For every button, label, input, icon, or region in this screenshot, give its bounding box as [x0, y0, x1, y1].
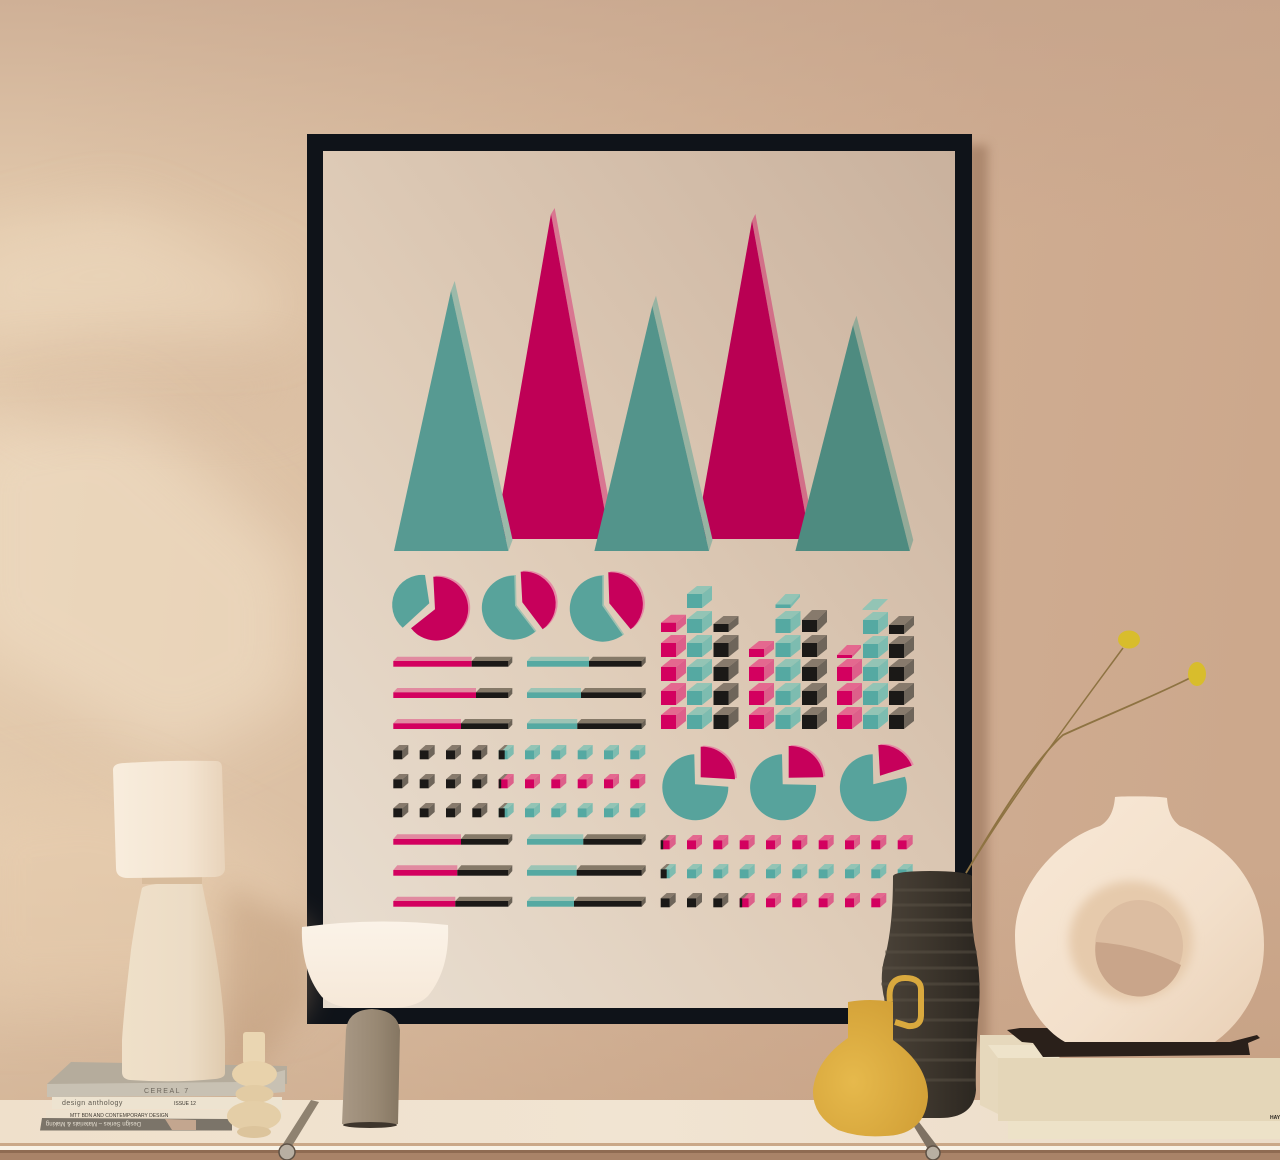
- magenta triangle 2: [695, 214, 815, 539]
- vase cup: [113, 761, 225, 878]
- pie 2: [482, 571, 558, 640]
- lower bar row 3 right: [527, 897, 646, 907]
- box base: [1008, 1121, 1280, 1139]
- book stack: [40, 1062, 287, 1130]
- lid top: [988, 1045, 1060, 1058]
- yellow jug: [813, 978, 928, 1136]
- stacked bars lower left: [393, 834, 646, 907]
- book three: MTT BDN AND CONTEMPORARY DESIGN: [70, 1113, 169, 1119]
- jug body: [813, 1000, 928, 1136]
- book two: [52, 1097, 282, 1109]
- column group 3: [837, 599, 914, 729]
- isometric cube columns: [661, 586, 914, 729]
- book one spine: [47, 1070, 285, 1097]
- lower bar row 3 left: [393, 897, 512, 907]
- cube row 2: [393, 774, 645, 788]
- book two: design anthology: [62, 1100, 123, 1107]
- book two: ISSUE 12: [174, 1101, 196, 1107]
- frame shadow on wall: [966, 145, 988, 1045]
- dark ribbed vase: [881, 871, 980, 1118]
- bar row 3 left: [393, 719, 512, 729]
- book one spine: CEREAL 7: [144, 1088, 190, 1095]
- shelf joint right: [913, 1122, 938, 1151]
- box lid: [998, 1058, 1280, 1121]
- right cube row 3: [661, 893, 886, 907]
- teal triangle 1: [394, 281, 513, 551]
- poster paper: [323, 151, 955, 1008]
- black tray: [1007, 1028, 1260, 1057]
- flower head 1: [1118, 630, 1140, 648]
- right cube row 2: [661, 864, 913, 878]
- lower bar row 1 right: [527, 834, 646, 845]
- bar row 3 right: [527, 719, 646, 729]
- marble stand: [342, 1009, 400, 1128]
- teal triangle 2: [594, 296, 713, 551]
- tall white vase: [113, 761, 225, 1081]
- lower bar row 2 left: [393, 865, 512, 876]
- triangle chart: [394, 208, 913, 551]
- bar row 2 right: [527, 688, 646, 698]
- cube row 1: [393, 745, 645, 759]
- book four: [40, 1118, 232, 1130]
- small pie C: [840, 744, 914, 821]
- box lid: HAY: [1270, 1115, 1280, 1121]
- vase neck ring: [142, 876, 202, 884]
- upper pie charts: [392, 571, 645, 642]
- book three: [46, 1110, 282, 1119]
- dried flower stems: [966, 630, 1206, 873]
- small pie B: [750, 745, 825, 820]
- small pie A: [662, 746, 737, 820]
- right cube row 1: [661, 835, 913, 849]
- small cube grid right: [661, 835, 913, 907]
- jug handle: [890, 978, 921, 1026]
- bar row 1 left: [393, 657, 512, 667]
- bar row 2 left: [393, 688, 512, 698]
- small cube grid left: [393, 745, 645, 817]
- chrome ball left: [279, 1144, 295, 1160]
- pie 1: [392, 575, 470, 641]
- stacked bars upper left: [393, 657, 646, 729]
- shelf: [0, 1100, 1280, 1160]
- vase silhouette: [1015, 796, 1264, 1042]
- object shadows on wall: [225, 885, 310, 1090]
- cube row 3: [393, 803, 645, 817]
- lower bar row 1 left: [393, 834, 512, 845]
- column group 1: [661, 586, 738, 729]
- magenta triangle 1: [495, 208, 616, 539]
- top book cover: [47, 1062, 287, 1084]
- pie 3: [570, 571, 645, 642]
- bar row 1 right: [527, 657, 646, 667]
- teal triangle 3: [795, 316, 913, 551]
- lower pie charts: [662, 744, 914, 821]
- white bowl: [302, 921, 448, 1008]
- book four: Design Series – Materials & Making: [46, 1120, 141, 1126]
- rear box: [980, 1035, 1038, 1118]
- flower head 2: [1188, 662, 1206, 686]
- small beige ribbed bottle: [227, 1032, 281, 1138]
- donut vase: [1007, 796, 1264, 1057]
- poster frame: [307, 134, 972, 1024]
- stacked storage boxes: [980, 1035, 1280, 1139]
- column group 2: [749, 594, 827, 729]
- lower bar row 2 right: [527, 865, 646, 876]
- shelf joint left: [283, 1100, 319, 1146]
- hole with wall visible: [1095, 900, 1183, 997]
- chrome ball right: [926, 1146, 940, 1160]
- inner ring shade: [1069, 881, 1193, 1001]
- vase base cone: [122, 883, 225, 1081]
